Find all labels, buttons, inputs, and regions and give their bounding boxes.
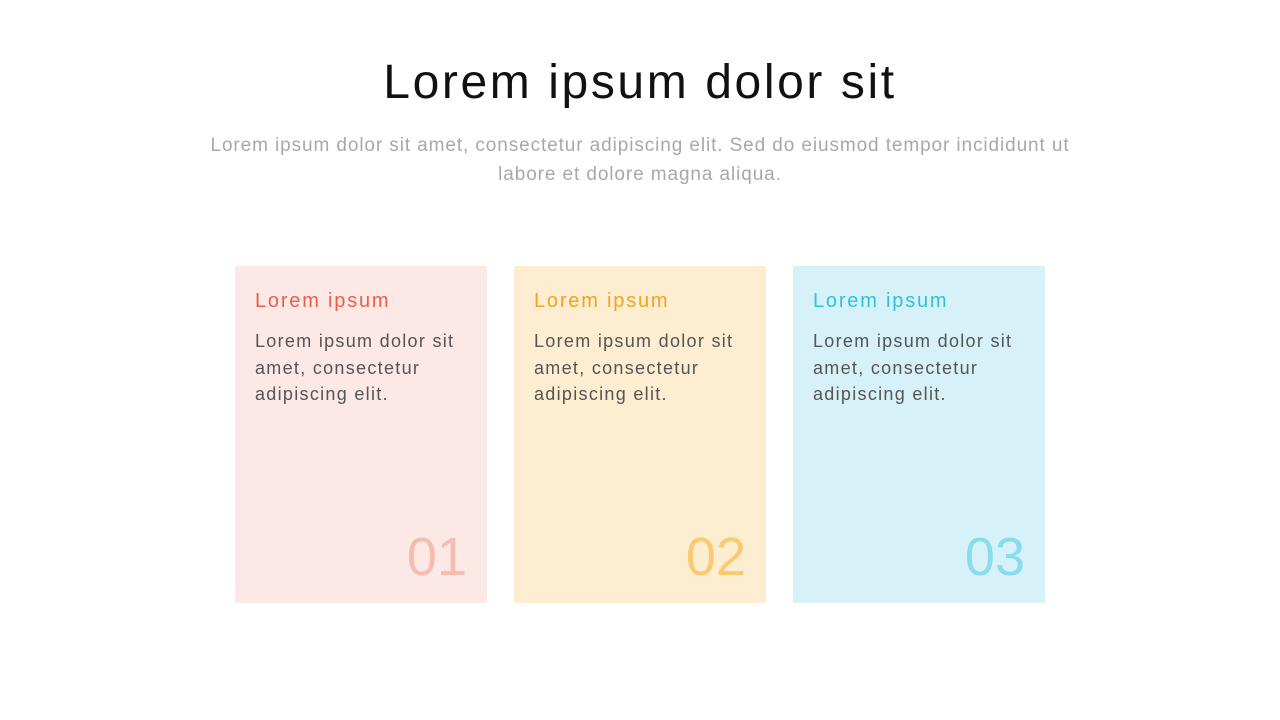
card body: amet, consectetur [813,358,978,378]
card body [813,331,1012,404]
card body: adipiscing elit. [813,384,947,404]
card body: amet, consectetur [534,358,699,378]
card body: adipiscing elit. [255,384,389,404]
panel: card 01 [235,266,487,603]
card heading: Lorem ipsum [534,290,669,312]
card body: Lorem ipsum dolor sit [813,331,1012,351]
card number: 01 [407,527,467,587]
card body: Lorem ipsum dolor sit [534,331,733,351]
card body: amet, consectetur [255,358,420,378]
card body: Lorem ipsum dolor sit [255,331,454,351]
card body [255,331,454,404]
card number: 03 [965,527,1025,587]
subtitle: Lorem ipsum dolor sit amet, consectetur adipiscing elit. Sed do eiusmod tempor incididunt ut [210,135,1070,156]
card number: 02 [686,527,746,587]
card heading: Lorem ipsum [255,290,390,312]
card body: adipiscing elit. [534,384,668,404]
subtitle: labore et dolore magna aliqua. [498,164,782,185]
panel: card 02 [514,266,766,603]
title: Lorem ipsum dolor sit [383,56,897,109]
card body [534,331,733,404]
subtitle [210,135,1070,185]
panel: card 03 [793,266,1045,603]
card heading: Lorem ipsum [813,290,948,312]
